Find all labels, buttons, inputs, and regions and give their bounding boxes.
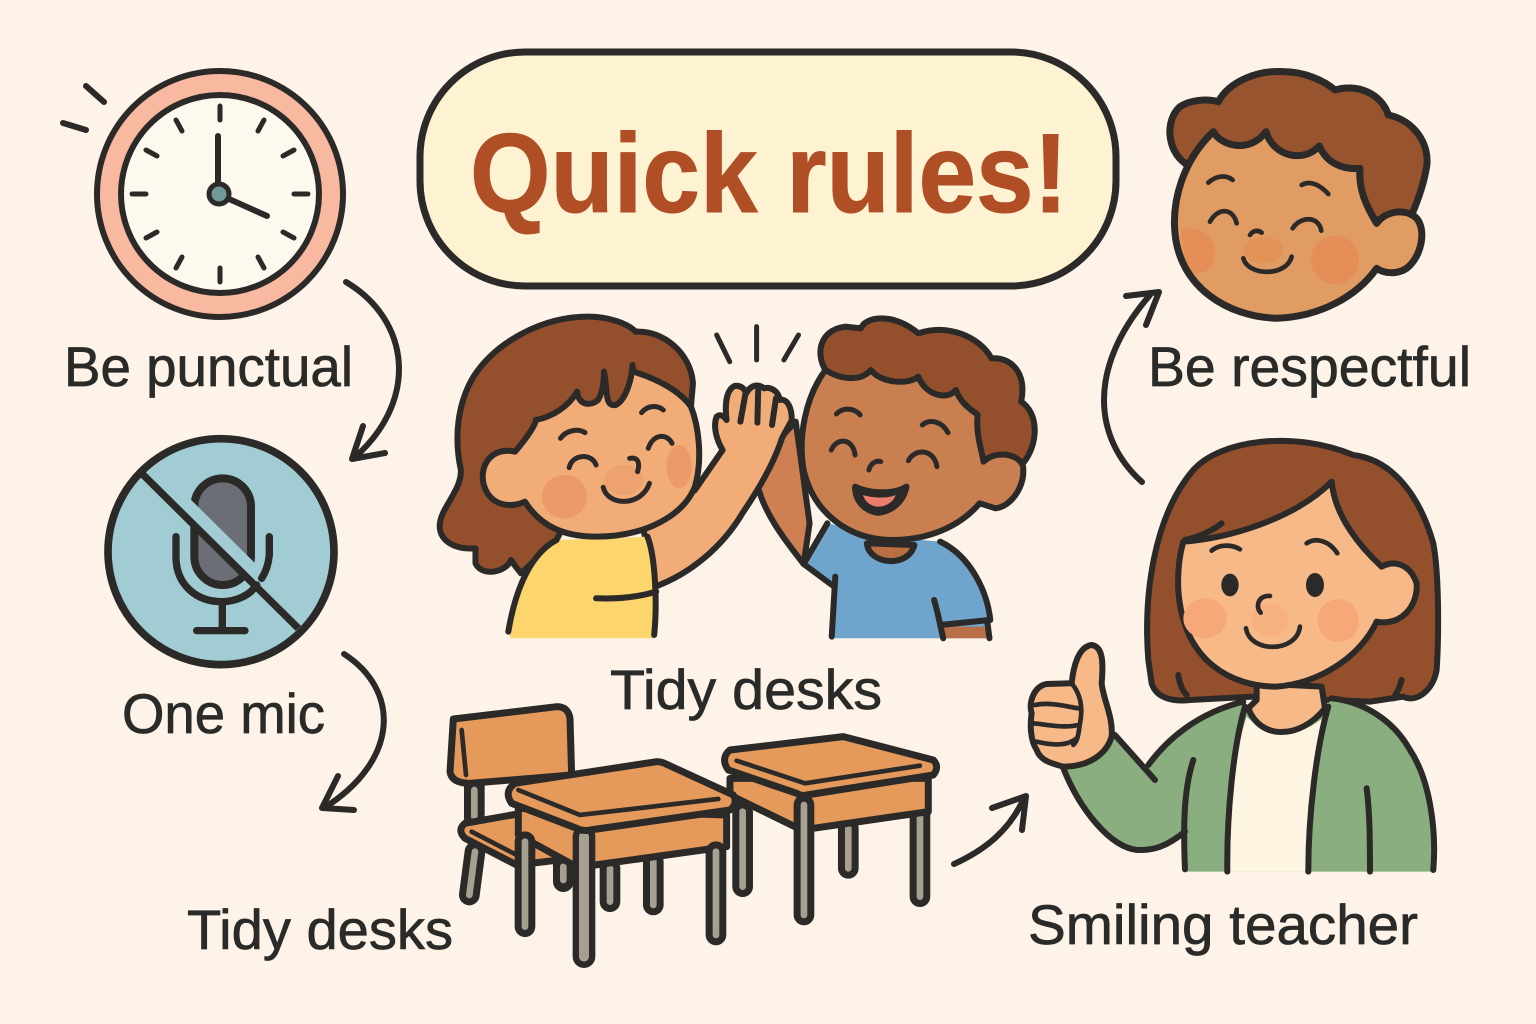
illustration: smiling teacher [1031,441,1438,872]
back desk [725,737,937,915]
chair [450,707,573,895]
label: be respectful: Be respectful [1148,335,1471,398]
arrow: teacher to respectful child [1104,292,1159,482]
neck [1248,683,1325,732]
label: tidy desks centre: Tidy desks [610,658,882,721]
illustration: desks and chair [450,707,937,957]
girl [440,317,792,638]
icon: smiling child [1170,71,1427,318]
label: smiling teacher: Smiling teacher [1028,893,1418,956]
cardigan lines [1063,698,1434,872]
hair [1147,441,1438,702]
label: one mic: One mic [122,682,325,745]
arrow: clock to mic [346,282,399,459]
face [1178,482,1417,687]
clap sparks [717,327,799,362]
cardigan [1063,698,1434,872]
thumbs up hand [1031,645,1112,767]
title pill [420,52,1116,286]
label: be punctual: Be punctual [64,335,353,398]
boy [802,318,1035,638]
arrow: mic to desks [322,654,384,810]
shirt [1227,717,1325,872]
boy's raised arm [756,422,810,564]
icon: clock [63,71,343,317]
title pill: Quick rules! [470,111,1068,236]
icon: no microphone [108,439,334,665]
arrow: desks to teacher [954,796,1026,864]
front desk [508,762,735,957]
illustration: high-fiving children [440,317,1035,638]
label: tidy desks left: Tidy desks [187,898,453,961]
